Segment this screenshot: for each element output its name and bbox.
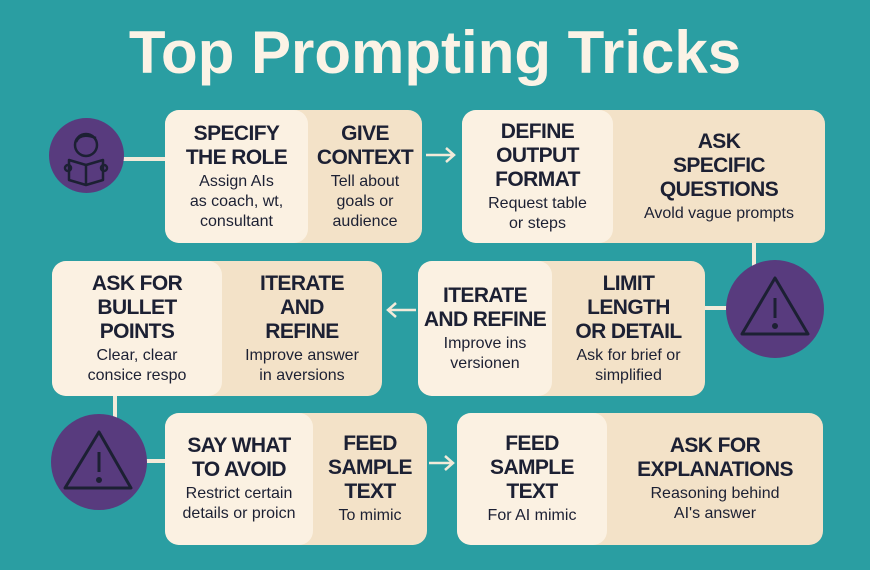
right: ask specific questions: SPECIFIC bbox=[673, 154, 765, 176]
connector card4 to circle2 bbox=[703, 306, 729, 310]
left: define output format: FORMAT bbox=[495, 168, 580, 190]
left: specify the role: Assign AIs bbox=[199, 172, 274, 190]
left: iterate and refine bbox=[418, 261, 552, 396]
left: say what to avoid: Restrict certain bbox=[186, 485, 292, 502]
left: feed sample text: For AI mimic bbox=[488, 507, 576, 524]
left: say what to avoid: details or proicn bbox=[183, 505, 295, 522]
left: define output format: OUTPUT bbox=[496, 144, 579, 166]
card: avoid / feed sample bbox=[165, 413, 427, 545]
right: feed sample text: FEED bbox=[343, 432, 397, 455]
right: ask for explanations: Reasoning behind bbox=[650, 485, 780, 502]
left: ask for bullet points: POINTS bbox=[100, 320, 174, 342]
left: ask for bullet points bbox=[52, 261, 222, 396]
right: feed sample text: TEXT bbox=[344, 480, 396, 503]
right: iterate and refine: REFINE bbox=[265, 320, 339, 342]
left: feed sample text: TEXT bbox=[506, 480, 558, 503]
left: specify the role: as coach, wt, bbox=[190, 192, 283, 210]
right: ask specific questions: ASK bbox=[698, 130, 740, 152]
connector vertical right bbox=[752, 243, 756, 267]
card: feed sample / explanations bbox=[457, 413, 823, 545]
right: iterate and refine: AND bbox=[280, 296, 324, 318]
left: iterate and refine: versionen bbox=[450, 354, 520, 372]
arrow right row3 bbox=[429, 455, 455, 471]
left: specify the role bbox=[165, 110, 308, 243]
left: define output format bbox=[462, 110, 613, 243]
connector vertical left bbox=[113, 396, 117, 420]
left: feed sample text: FEED bbox=[505, 432, 559, 455]
right: ask specific questions bbox=[644, 130, 794, 222]
right: give context: Tell about bbox=[331, 172, 399, 190]
left: iterate and refine: Improve ins bbox=[444, 334, 526, 352]
connector: circle1 to card1 bbox=[120, 157, 168, 161]
right: give context: GIVE bbox=[341, 122, 389, 144]
right: give context: CONTEXT bbox=[317, 146, 413, 168]
right: limit length: Ask for brief or bbox=[576, 346, 681, 364]
left: say what to avoid: SAY WHAT bbox=[187, 434, 291, 457]
left: specify the role: SPECIFY bbox=[194, 122, 279, 144]
right: iterate and refine: Improve answer bbox=[245, 346, 359, 364]
left: feed sample text bbox=[457, 413, 607, 545]
right: limit length bbox=[575, 272, 682, 384]
left: define output format: DEFINE bbox=[501, 120, 574, 142]
left: feed sample text: SAMPLE bbox=[490, 456, 574, 479]
right: iterate and refine: in aversions bbox=[259, 366, 345, 384]
left: iterate and refine: AND REFINE bbox=[424, 308, 546, 330]
left: iterate and refine: ITERATE bbox=[443, 284, 527, 306]
left: ask for bullet points: BULLET bbox=[97, 296, 177, 318]
card: iterate / limit length bbox=[418, 261, 705, 396]
right: ask for explanations: EXPLANATIONS bbox=[637, 458, 793, 481]
icon: warning circle left bbox=[51, 414, 147, 510]
left: say what to avoid bbox=[165, 413, 313, 545]
right: feed sample text: SAMPLE bbox=[328, 456, 412, 479]
left: define output format: or steps bbox=[509, 214, 566, 232]
right: limit length: OR DETAIL bbox=[575, 320, 682, 342]
arrow left row2 bbox=[386, 302, 416, 318]
title: Top Prompting Tricks bbox=[129, 19, 741, 86]
right: ask specific questions: Avold vague prompts bbox=[644, 204, 794, 222]
right: ask for explanations: AI's answer bbox=[674, 505, 756, 522]
right: limit length: LIMIT bbox=[603, 272, 654, 294]
right: give context: audience bbox=[333, 212, 397, 230]
right: limit length: LENGTH bbox=[587, 296, 670, 318]
icon: warning circle right bbox=[726, 260, 824, 358]
right: iterate and refine bbox=[245, 272, 359, 384]
left: define output format: Request table bbox=[488, 194, 587, 212]
left: say what to avoid: TO AVOID bbox=[192, 458, 286, 481]
left: specify the role: consultant bbox=[200, 212, 273, 230]
connector circle3 to card5 bbox=[130, 459, 168, 463]
card: specify role / give context bbox=[165, 110, 422, 243]
card: bullet points / iterate bbox=[52, 261, 382, 396]
right: feed sample text bbox=[328, 432, 412, 524]
left: specify the role: THE ROLE bbox=[186, 146, 287, 168]
right: ask for explanations: ASK FOR bbox=[670, 434, 760, 457]
left: ask for bullet points: ASK FOR bbox=[92, 272, 182, 294]
card: output format / specific questions bbox=[462, 110, 825, 243]
right: give context: goals or bbox=[337, 192, 393, 210]
arrow right row1 bbox=[426, 147, 456, 163]
right: iterate and refine: ITERATE bbox=[260, 272, 344, 294]
right: give context bbox=[317, 122, 414, 230]
right: ask specific questions: QUESTIONS bbox=[660, 178, 778, 200]
icon: reader circle bbox=[49, 118, 124, 193]
right: ask for explanations bbox=[637, 434, 793, 522]
right: feed sample text: To mimic bbox=[338, 507, 402, 524]
left: ask for bullet points: consice respo bbox=[88, 366, 186, 384]
left: ask for bullet points: Clear, clear bbox=[97, 346, 177, 364]
right: limit length: simplified bbox=[595, 366, 662, 384]
